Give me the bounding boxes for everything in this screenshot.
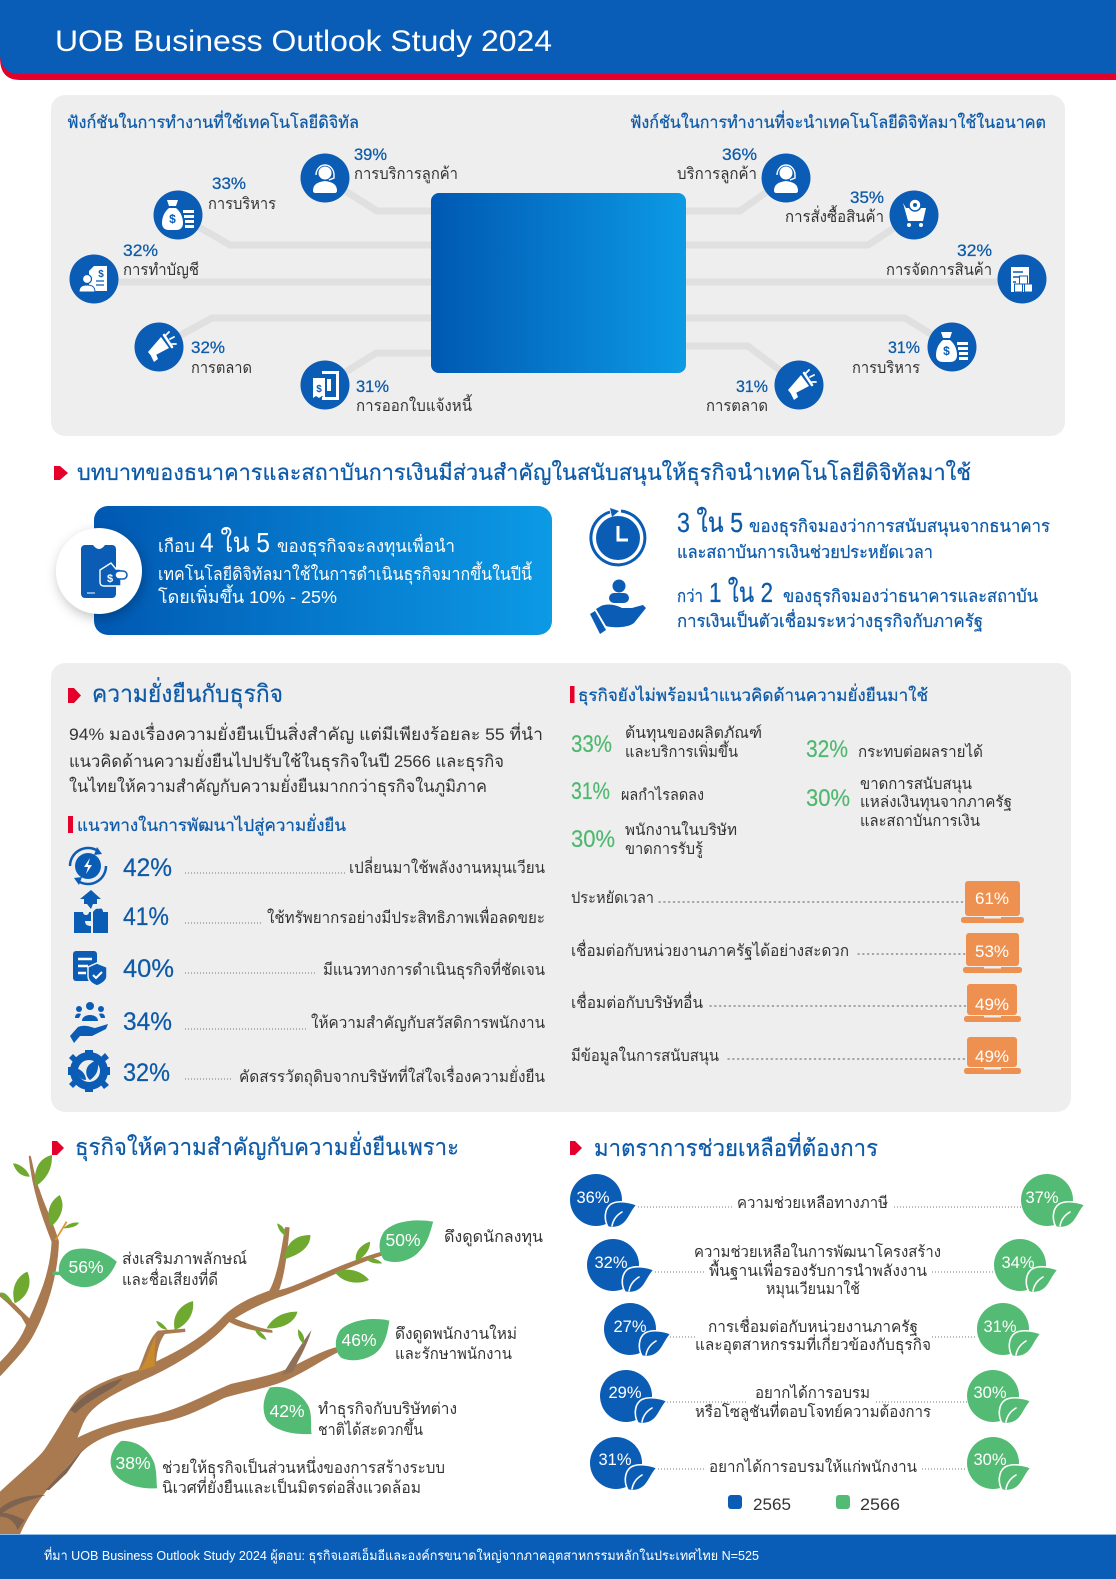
item: invoicing 31%: $ bbox=[316, 384, 322, 395]
row: sustainable sourcing 32%: คัดสรรวัตถุดิบจากบริษัทที่ใส่ใจเรื่องความยั่งยืน bbox=[239, 1065, 545, 1087]
reason: attract employees 46%: 46% bbox=[341, 1330, 377, 1350]
barrier: lack of funding 30%: ขาดการสนับสนุน bbox=[860, 776, 972, 794]
benefit: connect with companies 49% bbox=[571, 984, 1021, 1022]
stat: 3 in 5 save time: และสถาบันการเงินช่วยประหยัดเวลา bbox=[677, 542, 933, 562]
measure: training solutions bbox=[600, 1370, 1031, 1424]
item: invoicing 31%: การออกใบแจ้งหนี้ bbox=[356, 394, 472, 415]
icon: laptop 61 bbox=[961, 881, 1024, 923]
benefit: save time 61% bbox=[571, 881, 1024, 923]
reason: ecosystem 38%: ช่วยให้ธุรกิจเป็นส่วนหนึ่งของการสร้างระบบ bbox=[162, 1456, 445, 1478]
item: accounting 32%: 32% bbox=[123, 242, 158, 260]
barrier: revenue impact 32% bbox=[806, 736, 983, 763]
measure: government connections: การเชื่อมต่อกับหน่วยงานภาครัฐ bbox=[708, 1316, 918, 1336]
legend: 2566 bbox=[860, 1496, 900, 1514]
measure: training solutions: 29% bbox=[608, 1384, 642, 1402]
reason: foreign business 42%: 42% bbox=[269, 1401, 305, 1421]
reason: attract employees 46% bbox=[341, 1324, 517, 1363]
measure: renewable infrastructure: หมุนเวียนมาใช้ bbox=[766, 1280, 860, 1299]
stat: more than 1 in 2 connector: การเงินเป็นตัวเชื่อมระหว่างธุรกิจกับภาครัฐ bbox=[677, 609, 983, 632]
reason: attract investors 50% bbox=[385, 1229, 543, 1250]
callout: 4 in 5 businesses: เทคโนโลยีดิจิทัลมาใช้ในการดำเนินธุรกิจมากขึ้นในปีนี้ bbox=[158, 561, 532, 585]
section heading: support measures: มาตราการช่วยเหลือที่ต้องการ bbox=[594, 1132, 878, 1161]
barrier: staff awareness 30%: ขาดการรับรู้ bbox=[625, 841, 703, 859]
measure: tax support: 37% bbox=[1025, 1189, 1059, 1207]
icon: laptop 49 bbox=[964, 984, 1021, 1022]
barrier: product cost 33% bbox=[571, 724, 762, 761]
measure: renewable infrastructure: พื้นฐานเพื่อรองรับการนำพลังงาน bbox=[709, 1259, 927, 1280]
barrier: staff awareness 30%: 30% bbox=[571, 826, 615, 853]
icon: puzzle bbox=[74, 890, 108, 933]
measure: renewable infrastructure bbox=[587, 1239, 1058, 1299]
item: customer service 39% bbox=[300, 146, 458, 202]
measure: government connections: 31% bbox=[983, 1318, 1017, 1336]
benefit: connect with government 53% bbox=[571, 933, 1022, 973]
icon: clock bbox=[591, 508, 645, 565]
central gradient block bbox=[431, 193, 686, 373]
item: accounting 32%: $ bbox=[98, 269, 104, 280]
measure: renewable infrastructure: 32% bbox=[594, 1254, 628, 1272]
benefit: connect with companies 49%: เชื่อมต่อกับบริษัทอื่น bbox=[571, 991, 703, 1012]
illustration: tree with branches bbox=[0, 1155, 433, 1537]
row: clear guidelines 40%: มีแนวทางการดำเนินธุรกิจที่ชัดเจน bbox=[323, 958, 545, 980]
benefit: connect with government 53%: เชื่อมต่อกับหน่วยงานภาครัฐได้อย่างสะดวก bbox=[571, 939, 849, 960]
heading: sustainability and business: ความยั่งยืนกับธุรกิจ bbox=[92, 677, 283, 709]
text block: 94 percent: ในไทยให้ความสำคัญกับความยั่งยืนมากกว่าธุรกิจในภูมิภาค bbox=[69, 774, 487, 797]
item: marketing 32%: 32% bbox=[191, 339, 225, 357]
icon: phone wallet bbox=[81, 545, 127, 598]
measure: staff training: 31% bbox=[598, 1451, 632, 1469]
item: management 31%: 31% bbox=[888, 339, 920, 357]
item: ordering 35%: การสั่งซื้อสินค้า bbox=[785, 205, 884, 226]
leaf: 42 percent bbox=[263, 1387, 312, 1434]
item: marketing 31%: การตลาด bbox=[706, 398, 768, 415]
source note: ที่มา UOB Business Outlook Study 2024 ผู้ตอบ: ธุรกิจเอสเอ็มอีและองค์กรขนาดใหญ่จากภาคอุตสาหกรรมหลักในประเทศไทย N=525 bbox=[44, 1546, 759, 1564]
benefit: save time 61%: 61% bbox=[975, 889, 1009, 908]
measure: staff training: 30% bbox=[973, 1451, 1007, 1469]
leaf: 56 percent bbox=[53, 1248, 117, 1287]
leaf: 50 percent bbox=[379, 1220, 433, 1262]
item: marketing 32%: การตลาด bbox=[191, 360, 252, 377]
stat: more than 1 in 2 connector bbox=[590, 576, 1038, 634]
benefit: connect with companies 49%: 49% bbox=[975, 995, 1009, 1014]
benefit: save time 61%: ประหยัดเวลา bbox=[571, 890, 654, 907]
callout: 4 in 5 businesses: 4 ใน 5 bbox=[200, 526, 270, 558]
barrier: product cost 33%: ต้นทุนของผลิตภัณฑ์ bbox=[625, 724, 762, 743]
row: renewable energy 42%: 42% bbox=[123, 854, 172, 882]
row: resource efficiency 41%: ใช้ทรัพยากรอย่างมีประสิทธิภาพเพื่อลดขยะ bbox=[267, 906, 545, 927]
row: sustainable sourcing 32%: 32% bbox=[123, 1059, 170, 1087]
item: ordering 35%: 35% bbox=[850, 189, 884, 207]
reason: foreign business 42%: ทำธุรกิจกับบริษัทต่าง bbox=[318, 1401, 457, 1419]
reason: ecosystem 38%: 38% bbox=[115, 1453, 151, 1473]
barrier: staff awareness 30%: พนักงานในบริษัท bbox=[625, 821, 737, 839]
measure: renewable infrastructure: ความช่วยเหลือในการพัฒนาโครงสร้าง bbox=[694, 1243, 941, 1261]
row: clear guidelines 40% bbox=[73, 951, 545, 986]
item: customer service 39%: 39% bbox=[354, 146, 387, 164]
heading: functions adopting digital technology in future: ฟังก์ชันในการทำงานที่จะนำเทคโนโลยีดิจิทัลมาใช้ในอนาคต bbox=[630, 110, 1046, 132]
barrier: product cost 33%: และบริการเพิ่มขึ้น bbox=[625, 740, 738, 761]
item: marketing 31% bbox=[706, 360, 824, 415]
measure: tax support: ความช่วยเหลือทางภาษี bbox=[737, 1194, 888, 1212]
icon: hand with person bbox=[590, 580, 646, 634]
reason: brand image 56%: และชื่อเสียงที่ดี bbox=[122, 1268, 218, 1289]
row: resource efficiency 41%: 41% bbox=[123, 903, 169, 931]
barrier: lower profit 31%: 31% bbox=[571, 778, 610, 805]
measure: renewable infrastructure: 34% bbox=[1001, 1254, 1035, 1272]
reason: foreign business 42% bbox=[269, 1401, 457, 1439]
benefit: supporting data 49% bbox=[571, 1037, 1021, 1074]
subheading: not ready to adopt: ธุรกิจยังไม่พร้อมนำแนวคิดด้านความยั่งยืนมาใช้ bbox=[578, 683, 928, 706]
text block: 94 percent: แนวคิดด้านความยั่งยืนไปปรับใช้ในธุรกิจในปี 2566 และธุรกิจ bbox=[69, 749, 504, 772]
item: inventory 32%: การจัดการสินค้า bbox=[886, 261, 992, 279]
measure: training solutions: อยากได้การอบรม bbox=[755, 1384, 870, 1402]
icon: laptop 49b bbox=[964, 1037, 1021, 1074]
stat: 3 in 5 save time bbox=[591, 506, 1050, 565]
measure: tax support bbox=[570, 1174, 1085, 1228]
item: customer service 39%: การบริการลูกค้า bbox=[354, 165, 458, 184]
item: invoicing 31%: 31% bbox=[356, 378, 389, 396]
row: employee welfare 34%: ให้ความสำคัญกับสวัสดิการพนักงาน bbox=[311, 1013, 545, 1032]
row: clear guidelines 40%: 40% bbox=[123, 955, 174, 983]
measure: training solutions: 30% bbox=[973, 1384, 1007, 1402]
measure: government connections: และอุตสาหกรรมที่เกี่ยวข้องกับธุรกิจ bbox=[695, 1334, 931, 1355]
benefit: connect with government 53%: 53% bbox=[975, 942, 1009, 961]
stat: 3 in 5 save time: 3 ใน 5 bbox=[677, 506, 743, 538]
row: resource efficiency 41% bbox=[74, 890, 545, 933]
barrier: revenue impact 32%: 32% bbox=[806, 736, 848, 763]
measure: government connections bbox=[604, 1303, 1041, 1357]
callout: 4 in 5 businesses: โดยเพิ่มขึ้น 10% - 25% bbox=[158, 584, 337, 607]
icon: renewable energy bbox=[70, 847, 106, 885]
row: renewable energy 42% bbox=[70, 847, 545, 885]
item: marketing 31%: 31% bbox=[736, 378, 768, 396]
barrier: lower profit 31%: ผลกำไรลดลง bbox=[621, 786, 704, 804]
item: ordering 35% bbox=[785, 189, 938, 240]
reason: brand image 56%: ส่งเสริมภาพลักษณ์ bbox=[122, 1249, 247, 1268]
subheading: paths to sustainability: แนวทางในการพัฒนาไปสู่ความยั่งยืน bbox=[77, 813, 346, 836]
item: management 33%: 33% bbox=[212, 175, 246, 193]
callout: 4 in 5 businesses bbox=[56, 506, 552, 635]
callout: 4 in 5 businesses: ของธุรกิจจะลงทุนเพื่อนำ bbox=[277, 534, 455, 557]
row: sustainable sourcing 32% bbox=[68, 1050, 545, 1092]
barrier: revenue impact 32%: กระทบต่อผลรายได้ bbox=[858, 743, 983, 761]
reason: foreign business 42%: ชาติได้สะดวกขึ้น bbox=[318, 1418, 423, 1439]
barrier: lower profit 31% bbox=[571, 778, 704, 805]
barrier: lack of funding 30% bbox=[806, 776, 1012, 830]
section heading: role of banks: บทบาทของธนาคารและสถาบันการเงินมีส่วนสำคัญในสนับสนุนให้ธุรกิจนำเทคโนโลยีดิจิทัลมาใช้ bbox=[77, 460, 971, 486]
barrier: staff awareness 30% bbox=[571, 821, 737, 859]
section heading: why sustainability matters: ธุรกิจให้ความสำคัญกับความยั่งยืนเพราะ bbox=[75, 1131, 459, 1161]
stat: more than 1 in 2 connector: 1 ใน 2 bbox=[709, 576, 773, 608]
footer bbox=[0, 1534, 1116, 1579]
icon: people on hand bbox=[70, 1002, 108, 1043]
benefit: supporting data 49%: 49% bbox=[975, 1047, 1009, 1066]
icon: phone wallet: $ bbox=[107, 573, 113, 585]
callout: 4 in 5 businesses: เกือบ bbox=[158, 536, 195, 556]
reason: brand image 56%: 56% bbox=[68, 1257, 104, 1277]
measure: staff training bbox=[590, 1437, 1031, 1491]
item: management 33% bbox=[154, 175, 276, 240]
title: UOB Business Outlook Study 2024 bbox=[55, 25, 552, 58]
reason: attract investors 50%: ดึงดูดนักลงทุน bbox=[444, 1229, 543, 1247]
reason: attract employees 46%: ดึงดูดพนักงานใหม่ bbox=[395, 1324, 517, 1344]
barrier: lack of funding 30%: แหล่งเงินทุนจากภาครัฐ bbox=[860, 794, 1012, 812]
measure: tax support: 36% bbox=[576, 1189, 610, 1207]
leaf: 38 percent bbox=[111, 1441, 157, 1488]
icon: document with shield bbox=[73, 951, 107, 986]
barrier: product cost 33%: 33% bbox=[571, 731, 612, 758]
item: customer service 36%: บริการลูกค้า bbox=[677, 165, 757, 184]
item: inventory 32%: 32% bbox=[957, 242, 992, 260]
row: employee welfare 34%: 34% bbox=[123, 1008, 172, 1036]
leaf: 46 percent bbox=[336, 1319, 389, 1360]
reason: attract investors 50%: 50% bbox=[385, 1230, 421, 1250]
item: management 33%: การบริหาร bbox=[208, 196, 276, 213]
item: management 31%: การบริหาร bbox=[852, 360, 920, 377]
panel: sustainability bbox=[51, 663, 1071, 1112]
item: customer service 36%: 36% bbox=[722, 146, 757, 164]
heading: functions using digital technology: ฟังก์ชันในการทำงานที่ใช้เทคโนโลยีดิจิทัล bbox=[67, 110, 359, 132]
stat: more than 1 in 2 connector: ของธุรกิจมองว่าธนาคารและสถาบัน bbox=[783, 586, 1038, 607]
item: invoicing 31% bbox=[300, 360, 472, 415]
item: marketing 32% bbox=[134, 322, 252, 377]
barrier: lack of funding 30%: และสถาบันการเงิน bbox=[860, 813, 980, 830]
benefit: supporting data 49%: มีข้อมูลในการสนับสนุน bbox=[571, 1046, 719, 1066]
measure: training solutions: หรือโซลูชันที่ตอบโจทย์ความต้องการ bbox=[695, 1401, 931, 1422]
legend: 2565 bbox=[753, 1496, 791, 1514]
row: employee welfare 34% bbox=[70, 1002, 545, 1043]
item: management 31% bbox=[852, 322, 976, 377]
reason: ecosystem 38% bbox=[115, 1453, 445, 1497]
item: accounting 32% bbox=[70, 242, 199, 304]
legend bbox=[728, 1495, 900, 1514]
item: customer service 36% bbox=[677, 146, 810, 202]
icon: gear with leaf bbox=[68, 1050, 110, 1092]
measure: staff training: อยากได้การอบรมให้แก่พนักงาน bbox=[709, 1458, 917, 1476]
item: inventory 32% bbox=[886, 242, 1046, 304]
row: renewable energy 42%: เปลี่ยนมาใช้พลังงานหมุนเวียน bbox=[349, 856, 545, 878]
header banner bbox=[0, 0, 1116, 80]
text block: 94 percent bbox=[69, 722, 543, 797]
reason: ecosystem 38%: นิเวศที่ยั่งยืนและเป็นมิตรต่อสิ่งแวดล้อม bbox=[162, 1476, 421, 1497]
stat: more than 1 in 2 connector: กว่า bbox=[677, 586, 703, 606]
panel: digital functions bbox=[51, 95, 1065, 436]
reason: attract employees 46%: และรักษาพนักงาน bbox=[395, 1346, 512, 1363]
stat: 3 in 5 save time: ของธุรกิจมองว่าการสนับสนุนจากธนาคาร bbox=[749, 516, 1050, 537]
text block: 94 percent: 94% มองเรื่องความยั่งยืนเป็นสิ่งสำคัญ แต่มีเพียงร้อยละ 55 ที่นำ bbox=[69, 722, 543, 744]
barrier: lack of funding 30%: 30% bbox=[806, 785, 850, 812]
reason: brand image 56% bbox=[68, 1249, 247, 1289]
measure: government connections: 27% bbox=[613, 1318, 647, 1336]
icon: laptop 53 bbox=[963, 933, 1022, 973]
item: accounting 32%: การทำบัญชี bbox=[123, 261, 199, 279]
